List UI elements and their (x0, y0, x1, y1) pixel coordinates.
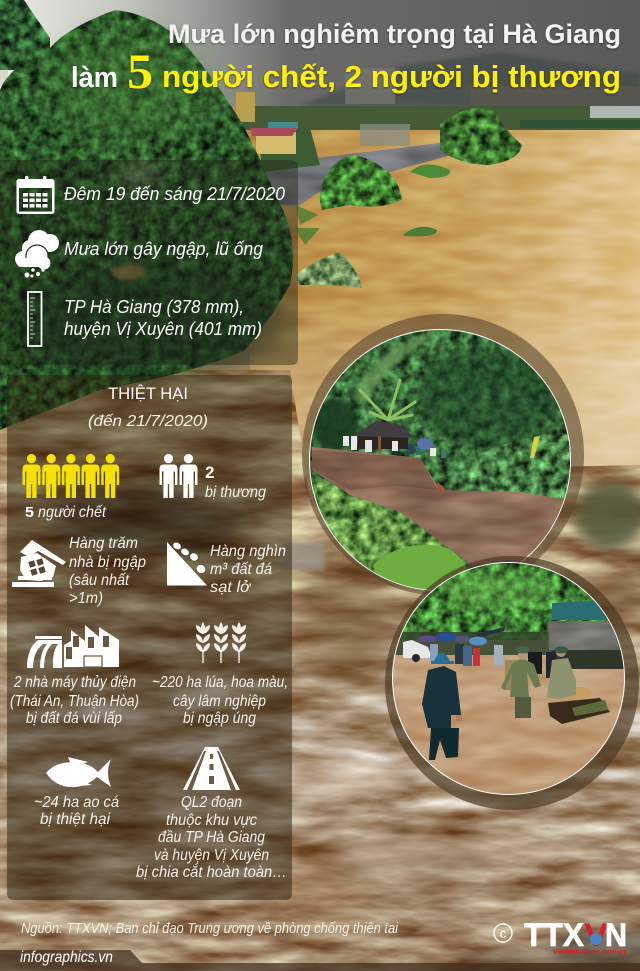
photo circle: landslide site (302, 314, 584, 600)
text: highway: và huyện Vị Xuyên (154, 847, 269, 864)
text: rainfall: huyện Vị Xuyên (401 mm) (64, 319, 262, 339)
text: landslide: Hàng nghìn (210, 543, 286, 560)
text: flooded houses: Hàng trăm (69, 535, 138, 552)
logo: TTXVN: V (584, 917, 609, 953)
officer in light coat (547, 646, 576, 699)
icon: fish (46, 757, 111, 787)
text: two injured: 2 (205, 463, 214, 482)
heading: damage: THIỆT HẠI (108, 384, 188, 403)
umbrellas (418, 627, 505, 646)
text: crops: bị ngập úng (183, 710, 256, 727)
text: highway (136, 794, 287, 881)
text: flooded houses: >1m) (69, 590, 103, 607)
embankment and riverside buildings (0, 52, 462, 205)
crowd (343, 436, 446, 458)
text: hydropower (10, 674, 139, 727)
flood rapids (0, 370, 640, 971)
text: flooded houses (69, 535, 146, 607)
hut (353, 421, 416, 452)
text: fish ponds (34, 794, 119, 828)
text: two injured (205, 463, 266, 501)
grey title band and distant town (0, 0, 640, 130)
icon: hydropower plants (27, 625, 119, 668)
text: five dead: người chết (38, 504, 106, 521)
text: hydropower: (Thái An, Thuận Hòa) (10, 693, 139, 710)
banana tree (360, 380, 415, 420)
text: landslide (210, 543, 286, 596)
panel: weather summary (0, 160, 298, 365)
text: cause: Mưa lớn gây ngập, lũ ống (64, 239, 263, 259)
logo: TTXVN: N (605, 917, 627, 953)
logo: TTXVN: Vietnam News Agency (553, 949, 627, 956)
logo: TTXVN: c (500, 926, 507, 941)
title: Mưa lớn nghiêm trọng tại Hà Giang (168, 19, 621, 49)
logo: TTXVN: TTX (524, 917, 585, 953)
white car (403, 640, 432, 662)
title: làm (71, 62, 118, 94)
text: landslide: sạt lở (210, 579, 251, 596)
debris (548, 687, 610, 724)
icon: two injured people (160, 454, 198, 498)
text: landslide: m³ đất đá (210, 561, 272, 578)
icon: rain clouds (15, 230, 59, 278)
text: rainfall (64, 297, 262, 339)
big tree and left hillside (0, 0, 293, 430)
footer band (0, 949, 640, 971)
photo circle: officials at flooded road (385, 556, 639, 810)
text: hydropower: 2 nhà máy thủy điện (13, 674, 136, 691)
text: rainfall: TP Hà Giang (378 mm), (64, 297, 244, 317)
text: highway: QL2 đoạn (181, 794, 242, 811)
trees and bushes on the water (295, 108, 522, 288)
text: hydropower: bị đất đá vùi lấp (26, 710, 122, 727)
website: infographics.vn (20, 949, 113, 966)
river water (250, 125, 640, 475)
source line: Nguồn: TTXVN; Ban chỉ đạo Trung ương về phòng chống thiên tai (21, 920, 399, 937)
title: 5 (127, 43, 153, 99)
officer with back turned (422, 652, 462, 760)
icon: calendar (16, 176, 54, 214)
building (548, 600, 627, 669)
text: two injured: bị thương (205, 484, 266, 501)
title: người chết, 2 người bị thương (162, 59, 621, 94)
text: crops (152, 674, 288, 727)
icon: rain gauge ruler (28, 292, 42, 346)
icon: rice wheat (196, 622, 246, 663)
icon: landslide (167, 541, 208, 586)
text: highway: đầu TP Hà Giang (158, 829, 265, 846)
subheading: date: (đến 21/7/2020) (88, 413, 208, 430)
crowd (430, 644, 556, 690)
text: fish ponds: bị thiệt hại (40, 811, 110, 828)
text: time: Đêm 19 đến sáng 21/7/2020 (64, 184, 285, 204)
logo: TTXVN (494, 917, 627, 956)
text: fish ponds: ~24 ha ao cá (34, 794, 119, 811)
text: crops: cây lâm nghiệp (173, 693, 266, 710)
icon: five dead people (22, 454, 119, 498)
title (71, 19, 621, 99)
text: highway: bị chia cắt hoàn toàn… (136, 862, 287, 881)
icon: road (183, 747, 240, 790)
text: five dead: 5 (25, 504, 34, 521)
icon: flooded house (12, 540, 66, 587)
officer in olive coat (501, 646, 541, 718)
text: flooded houses: (sâu nhất (69, 572, 129, 589)
text: highway: thuộc khu vực (166, 812, 257, 829)
panel: damage (7, 375, 292, 900)
text: crops: ~220 ha lúa, hoa màu, (152, 674, 288, 691)
text: flooded houses: nhà bị ngập (69, 554, 146, 571)
